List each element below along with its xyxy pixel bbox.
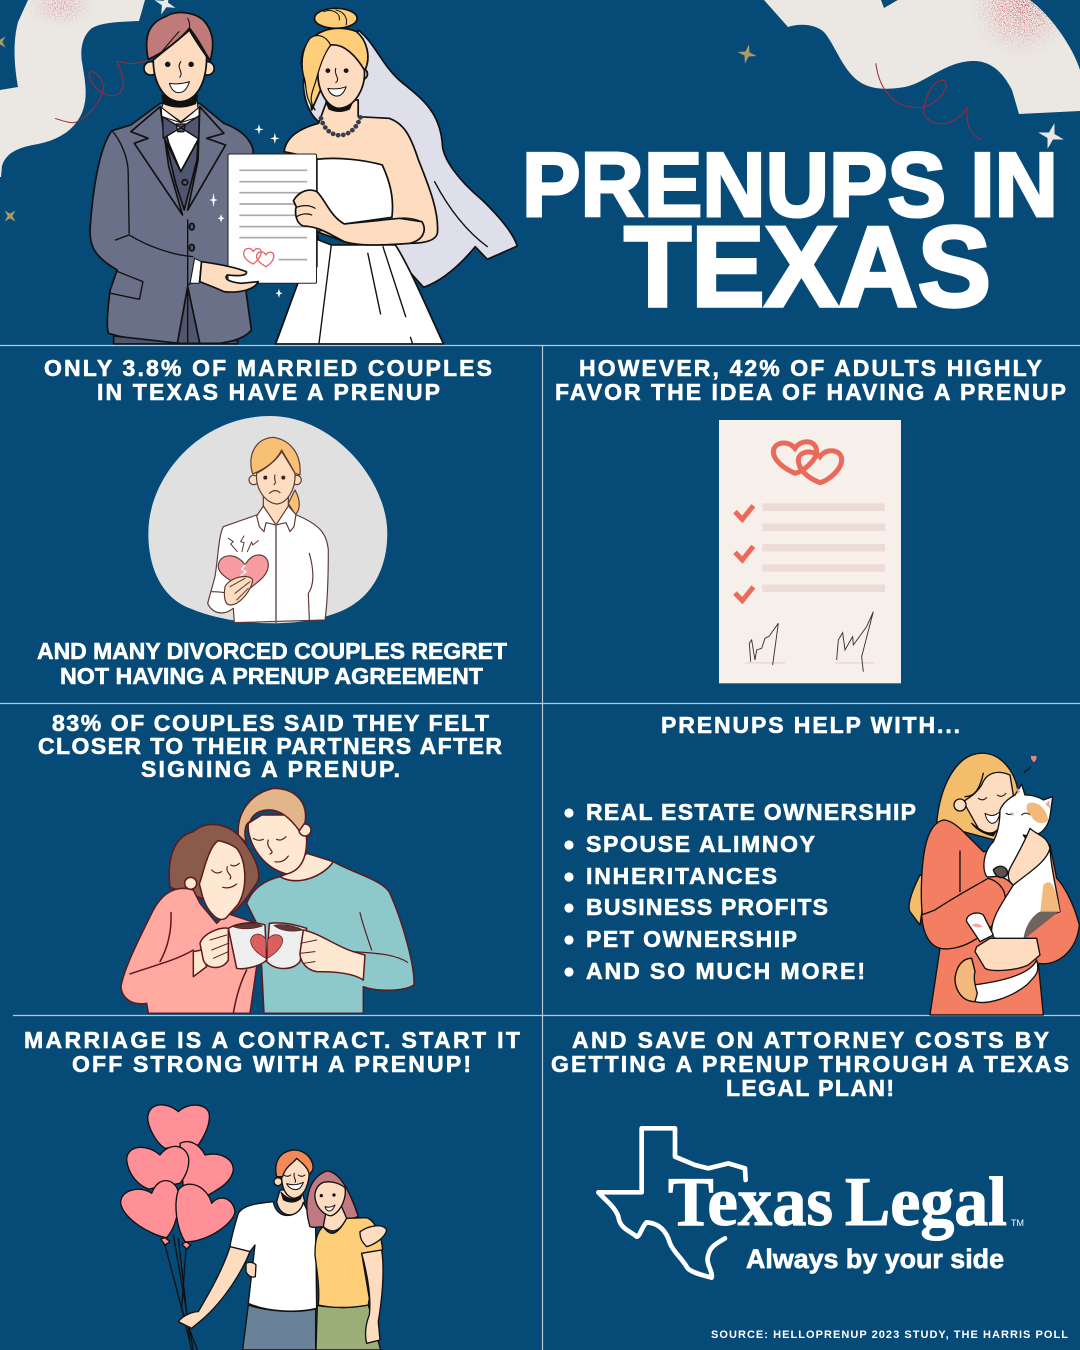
heading: marriage contract [24,1027,520,1077]
title [522,135,1058,331]
groom head [144,13,214,107]
woman sleeve [922,878,1005,949]
bullet list: AND SO MUCH MORE! [586,958,865,984]
title: PRENUPS IN [522,135,1058,236]
heading: 42 percent: FAVOR THE IDEA OF HAVING A PRENUP [555,379,1066,405]
groom trousers [114,287,238,344]
groom shirt and vest [160,112,200,172]
heading: 83 percent: 83% OF COUPLES SAID THEY FELT [52,710,489,736]
heading: 83 percent: CLOSER TO THEIR PARTNERS AFTER [38,733,502,759]
bullet list: BUSINESS PROFITS [586,894,828,920]
icon: Texas state outline [598,1128,746,1278]
heading: attorney costs: AND SAVE ON ATTORNEY COSTS BY [572,1027,1049,1053]
decorative wave: top right [764,0,1080,139]
text: divorced couples regret [37,638,507,689]
bride hand [293,190,424,245]
logo wordmark: Texas [668,1164,833,1241]
heading: 83 percent: SIGNING A PRENUP. [141,756,400,782]
bride head [301,8,368,112]
illustration: bride and groom holding prenup [90,8,517,344]
heading: attorney costs: LEGAL PLAN! [726,1075,894,1101]
groom neck [162,95,198,122]
illustration: woman hugging cat [909,753,1079,1015]
decorative stars [0,0,1067,227]
bride dress [276,158,444,344]
decorative wave: top left [0,0,148,177]
groom jacket [90,103,253,343]
illustration: couple with heart balloons [121,1105,387,1350]
logo wordmark [668,1164,1007,1241]
panel: prenups help with list [564,712,1079,1015]
dividers [0,345,1080,1350]
cat [984,784,1060,942]
bullet list: INHERITANCES [586,863,777,889]
panel: married couples statistic [37,355,507,689]
bullet list [564,799,916,984]
heading: marriage contract: OFF STRONG WITH A PRENUP! [72,1051,471,1077]
bride necklace [321,113,362,135]
bullet list: SPOUSE ALIMNOY [586,831,815,857]
bullet list: REAL ESTATE OWNERSHIP [586,799,916,825]
trademark mark: TM [1011,1218,1024,1228]
logo: Texas Legal [598,1128,1024,1278]
sparkles [209,124,282,298]
bride veil [304,30,517,287]
text: divorced couples regret: AND MANY DIVORCED COUPLES REGRET [37,638,507,664]
heading: 42 percent: HOWEVER, 42% OF ADULTS HIGHLY [579,355,1042,381]
heading: 42 percent [555,355,1066,405]
logo tagline: Always by your side [746,1244,1004,1274]
groom hand [200,262,258,292]
heading: 3.8 percent: IN TEXAS HAVE A PRENUP [97,379,440,405]
logo wordmark: Legal [845,1164,1007,1241]
bullet list: PET OWNERSHIP [586,926,797,952]
title: TEXAS [624,204,991,331]
heading: 3.8 percent [44,355,492,405]
groom sleeve cuff [190,258,201,283]
illustration: couple clinking mugs [121,788,414,1013]
illustration: signed prenup document [719,420,901,683]
heading: 83 percent [38,710,502,782]
heading: prenups help with: PRENUPS HELP WITH... [661,712,960,738]
heading: marriage contract: MARRIAGE IS A CONTRACT. START IT [24,1027,520,1053]
groom bow tie [163,116,199,139]
bride body [284,100,438,245]
heading: 3.8 percent: ONLY 3.8% OF MARRIED COUPLES [44,355,492,381]
text: divorced couples regret: NOT HAVING A PRENUP AGREEMENT [60,663,483,689]
heading: attorney costs: GETTING A PRENUP THROUGH A TEXAS [551,1051,1069,1077]
groom lapels [131,107,183,215]
panel: adults favor prenup [555,355,1066,683]
groom collar [161,107,199,123]
panel: save on attorney costs [551,1027,1069,1341]
illustration: heartbroken woman [148,416,387,623]
heading: attorney costs [551,1027,1069,1101]
panel: marriage is a contract [24,1027,520,1350]
source note: SOURCE: HELLOPRENUP 2023 STUDY, THE HARRIS POLL [711,1329,1068,1341]
panel: couples felt closer [38,710,502,1013]
prenup paper [228,154,317,283]
